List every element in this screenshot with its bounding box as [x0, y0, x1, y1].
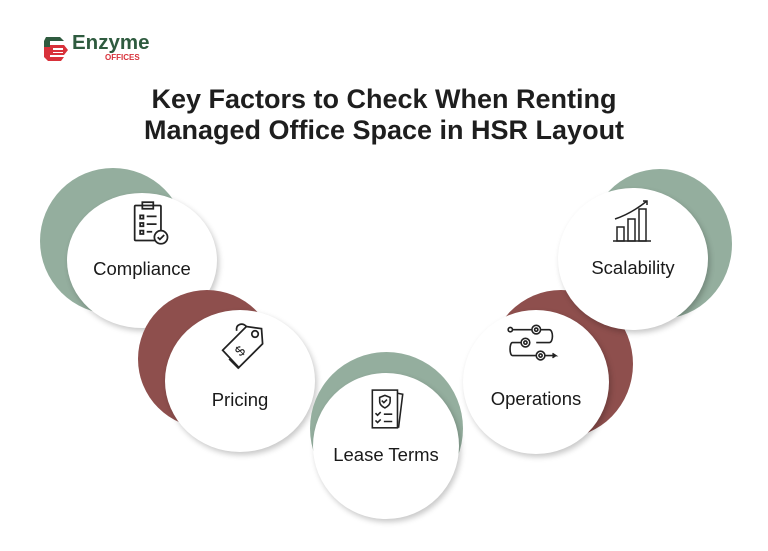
panel: pricing [138, 290, 320, 458]
icon: bar chart [613, 200, 651, 242]
panel: operations [462, 290, 633, 460]
title [144, 84, 624, 145]
panel: pricing: Pricing [212, 389, 268, 410]
icon: gears [507, 324, 558, 361]
panel: scalability: Scalability [591, 257, 675, 278]
icon: price tag: $ [231, 342, 248, 359]
logo: Enzyme [72, 31, 149, 54]
panel: scalability [558, 169, 732, 336]
logo: OFFICES [105, 53, 140, 62]
panel: lease terms [310, 352, 464, 524]
icon: price tag [222, 323, 264, 370]
panel: compliance: Compliance [93, 258, 191, 279]
panel: operations: Operations [491, 388, 581, 409]
title: Managed Office Space in HSR Layout [144, 115, 624, 145]
icon: document [372, 389, 404, 429]
icon: clipboard [134, 201, 168, 245]
logo [44, 31, 149, 62]
panel: compliance [40, 168, 222, 334]
title: Key Factors to Check When Renting [151, 84, 617, 114]
panel: lease terms: Lease Terms [333, 444, 439, 465]
